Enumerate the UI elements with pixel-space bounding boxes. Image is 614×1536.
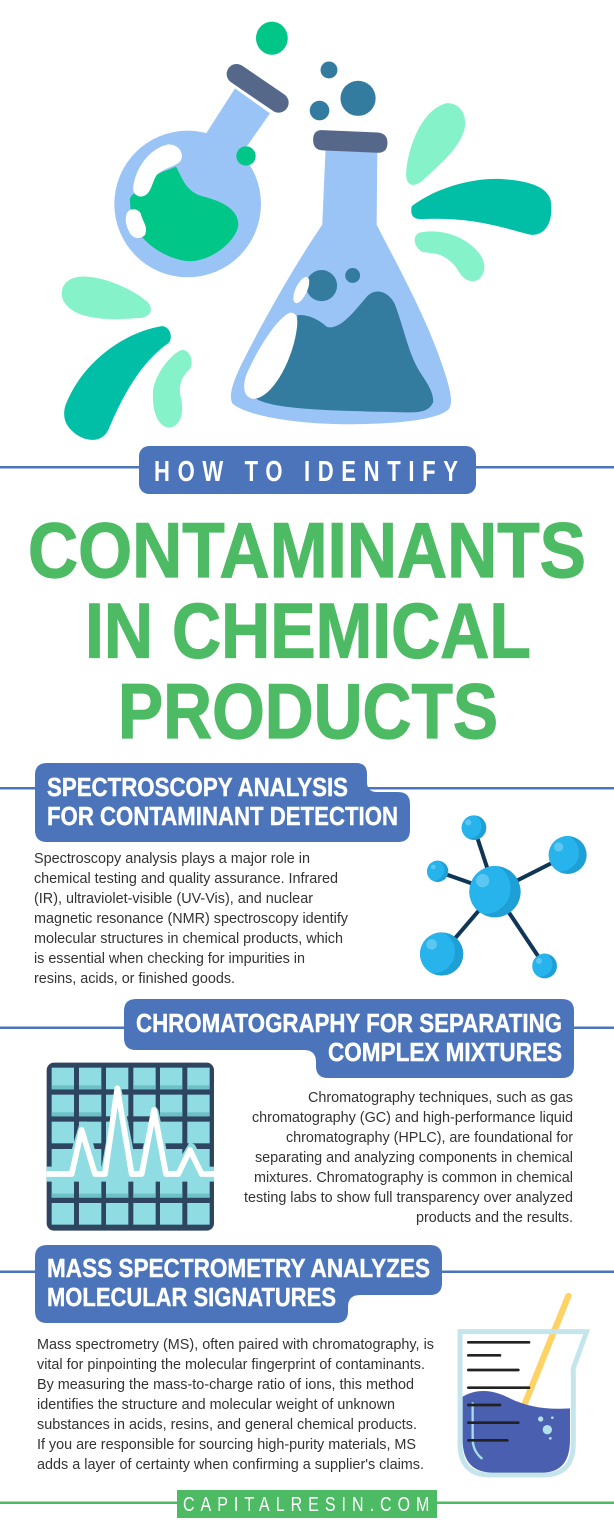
text block: chromatography description: testing labs to show full transparency over analyzed (244, 1190, 573, 1206)
text block: chromatography description: products and the results. (416, 1210, 573, 1226)
icon: beaker with stir rod (460, 1296, 587, 1475)
heading: chromatography (0, 999, 614, 1078)
text block: mass spectrometry description: adds a layer of certainty when confirming a supplier's claims. (37, 1457, 424, 1473)
icon: chromatogram grid (47, 1063, 214, 1231)
heading: chromatography: COMPLEX MIXTURES (328, 1039, 562, 1067)
title: PRODUCTS (118, 667, 498, 755)
footer: website banner: CAPITALRESIN.COM (183, 1493, 429, 1515)
text block: mass spectrometry description: Mass spectrometry (MS), often paired with chromatography, is (37, 1337, 434, 1353)
icon: molecule (412, 814, 587, 978)
icon: round flask (114, 74, 279, 277)
title: IN CHEMICAL (85, 586, 531, 674)
text block: chromatography description: separating and analyzing components in chemical (255, 1150, 573, 1166)
text block: spectroscopy description: magnetic resonance (NMR) spectroscopy identify (34, 911, 349, 927)
heading: spectroscopy: SPECTROSCOPY ANALYSIS (47, 774, 348, 802)
text block: spectroscopy description: is essential when checking for impurities in (34, 951, 305, 967)
text block: mass spectrometry description: If you are responsible for sourcing high-purity materials, MS (37, 1437, 416, 1453)
text block: mass spectrometry description (37, 1337, 434, 1473)
icon: droplet above round flask (256, 22, 288, 55)
icon: rising bubbles (310, 62, 376, 120)
panel: mass spectrometry (0, 1245, 614, 1475)
footer: website banner (0, 1490, 614, 1518)
subtitle banner: how to identify: HOW TO IDENTIFY (154, 456, 458, 488)
heading: mass spectrometry: MOLECULAR SIGNATURES (47, 1284, 336, 1312)
text block: chromatography description: chromatography (GC) and high-performance liquid (252, 1110, 573, 1126)
text block: spectroscopy description: (IR), ultraviolet-visible (UV-Vis), and nuclear (34, 891, 313, 907)
heading: mass spectrometry: MASS SPECTROMETRY ANALYZES (47, 1255, 430, 1283)
icon: conical flask (231, 130, 451, 424)
text block: spectroscopy description: Spectroscopy analysis plays a major role in (34, 851, 310, 867)
text block: chromatography description: Chromatography techniques, such as gas (308, 1090, 573, 1106)
panel: chromatography (0, 999, 614, 1231)
icon: splashes (62, 103, 551, 440)
text block: spectroscopy description (34, 851, 349, 987)
panel: spectroscopy (0, 763, 614, 987)
heading: spectroscopy (0, 763, 614, 842)
title (28, 506, 586, 755)
text block: chromatography description (244, 1090, 573, 1226)
text block: chromatography description: chromatography (HPLC), are foundational for (286, 1130, 573, 1146)
text block: mass spectrometry description: substances in acids, resins, and general chemical products. (37, 1417, 417, 1433)
text block: spectroscopy description: molecular structures in chemical products, which (34, 931, 343, 947)
heading: mass spectrometry (0, 1245, 614, 1323)
text block: mass spectrometry description: By measuring the mass-to-charge ratio of ions, this method (37, 1377, 414, 1393)
text block: spectroscopy description: chemical testing and quality assurance. Infrared (34, 871, 338, 887)
text block: mass spectrometry description: identifies the structure and molecular weight of unknown (37, 1397, 395, 1413)
text block: chromatography description: mixtures. Chromatography is common in chemical (254, 1170, 573, 1186)
subtitle banner: how to identify (0, 446, 614, 494)
text block: spectroscopy description: resins, acids, or finished goods. (34, 971, 235, 987)
heading: spectroscopy: FOR CONTAMINANT DETECTION (47, 803, 398, 831)
text block: mass spectrometry description: vital for pinpointing the molecular fingerprint of contaminants. (37, 1357, 425, 1373)
hero illustration: flasks and splashes (62, 22, 551, 440)
heading: chromatography: CHROMATOGRAPHY FOR SEPARATING (136, 1010, 562, 1038)
